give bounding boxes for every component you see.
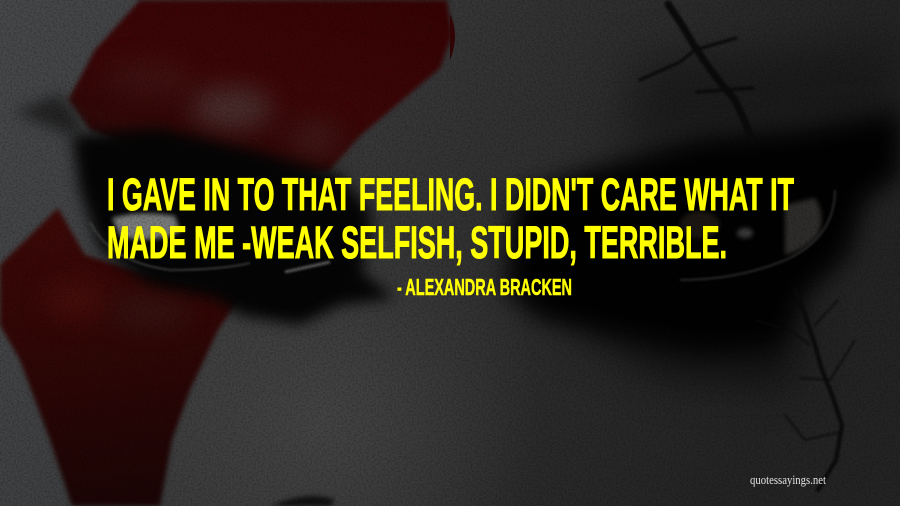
right brow and eye socket shadow [505,112,900,350]
war paint: upper red band [68,0,452,175]
lower band highlight [45,280,188,327]
left eye white [112,213,180,240]
scars [640,4,855,490]
right lower eyelid line [680,190,835,280]
red sliver [450,14,455,60]
quote text [107,169,794,268]
left eyelid line [90,222,330,272]
right eye white and iris [680,198,821,255]
war paint: lower red band [0,208,245,506]
nostril shadow [270,496,335,506]
left brow hairs [14,94,85,135]
watermark: quotessayings.net [750,472,826,487]
left brow and eye socket shadow [72,128,395,325]
right forehead shadow [560,40,900,385]
attribution: - ALEXANDRA BRACKEN [397,274,572,300]
war paint: worn highlight on upper band [108,62,339,158]
